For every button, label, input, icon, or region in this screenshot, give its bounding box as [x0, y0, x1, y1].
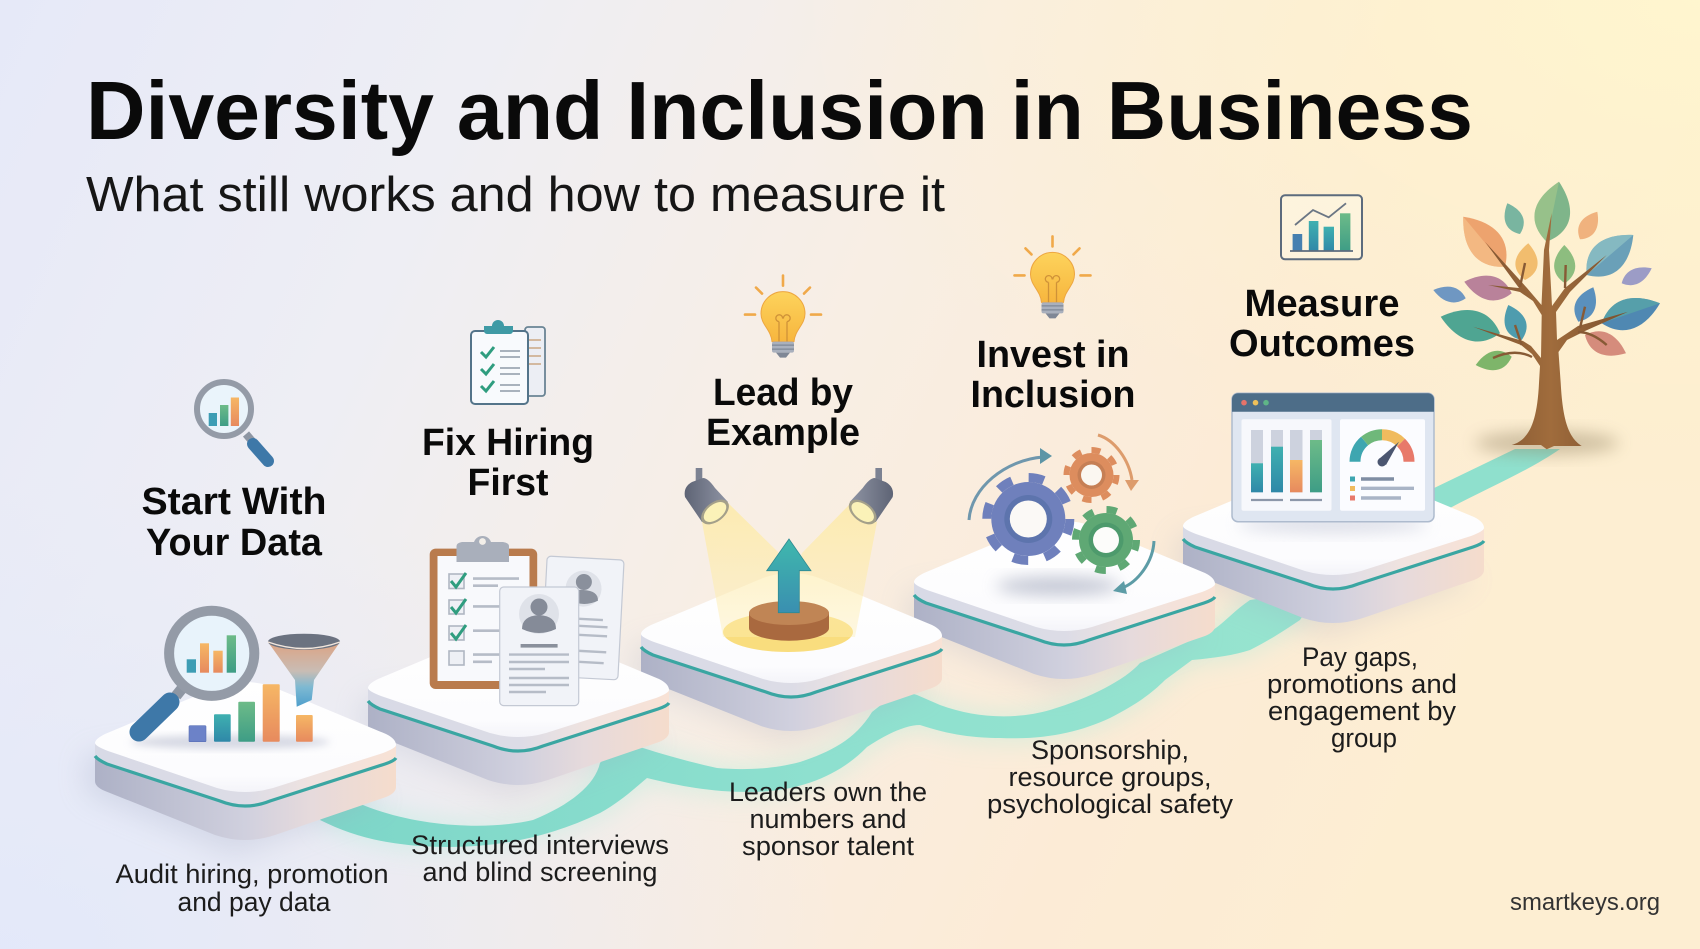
- heading: fix hiring first: [422, 422, 594, 504]
- platform 1: [95, 682, 396, 840]
- description: step 3: Leaders own the: [729, 777, 927, 807]
- tree: [1431, 178, 1665, 455]
- description: step 5: promotions and: [1267, 669, 1457, 699]
- description: step 2: and blind screening: [422, 857, 658, 887]
- description: step 5: Pay gaps,: [1302, 642, 1418, 672]
- description: step 5: group: [1331, 723, 1397, 753]
- leaves: [1431, 178, 1665, 374]
- icon: framed bar chart: [1281, 195, 1362, 259]
- illustration: spotlights on arrow: [685, 468, 893, 652]
- heading: fix hiring first: First: [468, 462, 549, 504]
- description: step 4: resource groups,: [1008, 762, 1212, 792]
- illustration: magnifier, bars and funnel: [130, 611, 340, 749]
- icon: small magnifier: [197, 382, 268, 461]
- description: step 1: and pay data: [178, 887, 331, 917]
- heading: invest in inclusion: [970, 334, 1136, 416]
- description: step 3: [729, 777, 927, 861]
- icon: light bulb invest: [1014, 236, 1090, 318]
- heading: lead by example: Lead by: [713, 372, 853, 414]
- description: step 2: Structured interviews: [411, 830, 669, 860]
- platform 5: [1183, 465, 1484, 623]
- platform 4: [914, 521, 1215, 679]
- description: step 4: [987, 735, 1233, 819]
- heading: start with your data: Your Data: [146, 522, 323, 564]
- winding teal path: [320, 449, 1560, 847]
- step 2: platform and clipboard: [361, 536, 669, 798]
- icon: light bulb lead: [745, 276, 821, 358]
- tree trunk and branches: [1473, 213, 1628, 449]
- title: Diversity and Inclusion in Business: [86, 64, 1473, 157]
- description: step 3: sponsor talent: [742, 831, 915, 861]
- heading: measure outcomes: Outcomes: [1229, 323, 1415, 365]
- heading: fix hiring first: Fix Hiring: [422, 422, 594, 464]
- description: step 4: Sponsorship,: [1031, 735, 1189, 765]
- heading: invest in inclusion: Inclusion: [970, 374, 1136, 416]
- icon: checklist: [471, 320, 545, 404]
- step 5: platform and dashboard: [1176, 393, 1484, 636]
- heading: start with your data: Start With: [142, 481, 326, 523]
- step 3: platform and spotlights: [634, 468, 942, 744]
- description: step 4: psychological safety: [987, 789, 1233, 819]
- step 1: platform and data illustration: [85, 611, 396, 855]
- step 4: platform and gears: [907, 435, 1215, 692]
- description: step 5: [1267, 642, 1457, 753]
- description: step 3: numbers and: [750, 804, 906, 834]
- platform 2: [368, 627, 669, 785]
- description: step 5: engagement by: [1268, 696, 1457, 726]
- heading: start with your data: [142, 481, 326, 564]
- subtitle: What still works and how to measure it: [86, 168, 945, 222]
- illustration: clipboard and resumes: [430, 536, 624, 706]
- heading: lead by example: Example: [706, 412, 860, 454]
- heading: invest in inclusion: Invest in: [976, 334, 1130, 376]
- description: step 1: Audit hiring, promotion: [116, 859, 388, 889]
- heading: measure outcomes: [1229, 283, 1415, 365]
- platform 3: [641, 573, 942, 731]
- illustration: dashboard window: [1232, 393, 1434, 533]
- illustration: gears with arrows: [969, 435, 1154, 595]
- heading: lead by example: [706, 372, 860, 454]
- source credit: smartkeys.org: [1510, 889, 1660, 916]
- heading: measure outcomes: Measure: [1244, 283, 1400, 325]
- description: step 2: [411, 830, 669, 887]
- description: step 1: [116, 859, 388, 917]
